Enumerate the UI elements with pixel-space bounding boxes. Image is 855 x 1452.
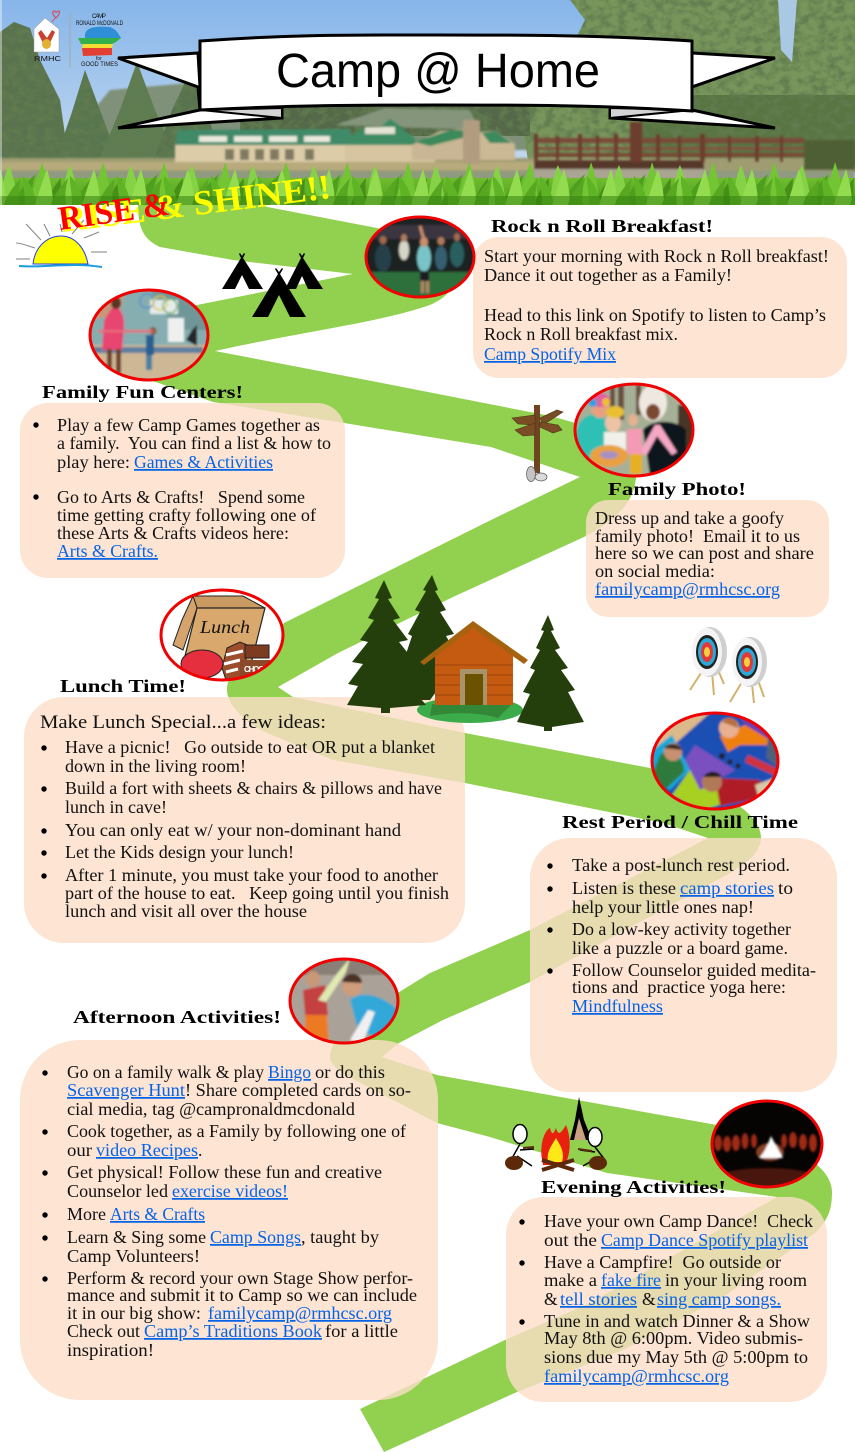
icon: tents bbox=[222, 253, 323, 317]
panel: afternoon activities: Scavenger Hunt bbox=[67, 1080, 185, 1100]
icon: campfire with marshmallow roasters bbox=[505, 1097, 607, 1170]
panel: evening activities: Have your own Camp Dance! Check bbox=[544, 1211, 813, 1231]
photo: hula hoops at family fun centers bbox=[88, 288, 210, 383]
title banner bbox=[118, 35, 775, 128]
panel: evening activities: May 8th @ 6:00pm. Video submis- bbox=[544, 1328, 803, 1348]
panel: afternoon activities: Cook together, as a Family by following one of bbox=[67, 1121, 406, 1141]
title text: Camp @ Home bbox=[276, 45, 600, 98]
panel: afternoon activities: it in our big show: bbox=[67, 1303, 201, 1323]
photo: goofy family photo bbox=[574, 383, 696, 479]
panel: family fun centers: Play a few Camp Games together as bbox=[57, 415, 320, 435]
photo: dancing at rock n roll breakfast bbox=[364, 216, 476, 298]
panel: evening activities: sing camp songs. bbox=[657, 1289, 781, 1309]
panel: lunch time: Build a fort with sheets & chairs & pillows and have bbox=[65, 778, 442, 798]
icon: signpost bbox=[512, 405, 563, 482]
header photo: camp lodge by the lake bbox=[0, 0, 855, 205]
panel: evening activities: fake fire bbox=[601, 1270, 661, 1290]
logo: Camp Ronald McDonald for Good Times bbox=[76, 14, 124, 68]
panel: family fun centers: Games & Activities bbox=[134, 452, 273, 472]
panel: evening activities: Camp Dance Spotify playlist bbox=[601, 1230, 808, 1250]
panel: evening activities: Have a Campfire! Go outside or bbox=[544, 1252, 781, 1272]
rise and shine heading: RISE & SHINE!! bbox=[58, 167, 333, 240]
panel: family fun centers bbox=[20, 382, 345, 578]
panel: lunch time bbox=[24, 676, 465, 943]
panel: lunch time: Have a picnic! Go outside to eat OR put a blanket bbox=[65, 737, 435, 757]
panel: afternoon activities: inspiration! bbox=[67, 1340, 154, 1360]
panel: afternoon activities: for a little bbox=[325, 1321, 398, 1341]
heading: rest period: Rest Period / Chill Time bbox=[562, 812, 798, 832]
panel: evening activities: sions due my May 5th @ 5:00pm to bbox=[544, 1347, 808, 1367]
panel: family fun centers: time getting crafty following one of bbox=[57, 505, 316, 525]
panel: afternoon activities: or do this bbox=[315, 1062, 385, 1082]
panel: lunch time: lunch in cave! bbox=[65, 797, 167, 817]
panel: afternoon activities: Learn & Sing some bbox=[67, 1227, 206, 1247]
panel: evening activities: out the bbox=[544, 1230, 597, 1250]
panel: evening activities: & bbox=[544, 1289, 558, 1309]
panel: afternoon activities: Perform & record your own Stage Show perfor- bbox=[67, 1268, 413, 1288]
panel: afternoon activities: Bingo bbox=[268, 1062, 311, 1082]
panel: rest period: Mindfulness bbox=[572, 996, 663, 1016]
panel: afternoon activities: our bbox=[67, 1140, 92, 1160]
logo: RMHC house: RMHC bbox=[34, 56, 61, 63]
heading: family photo: Family Photo! bbox=[608, 479, 746, 499]
panel: family photo: familycamp@rmhcsc.org bbox=[595, 579, 780, 599]
panel: evening activities: tell stories bbox=[560, 1289, 637, 1309]
panel: family photo: here so we can post and share bbox=[595, 543, 814, 563]
panel: family photo: on social media: bbox=[595, 561, 715, 581]
panel: evening activities: & bbox=[642, 1289, 656, 1309]
icon: sun bbox=[16, 220, 107, 267]
panel: rest period: to bbox=[778, 878, 793, 898]
panel: afternoon activities: Camp Volunteers! bbox=[67, 1246, 200, 1266]
panel: afternoon activities: , taught by bbox=[301, 1227, 379, 1247]
panel: afternoon activities: Go on a family walk & play bbox=[67, 1062, 264, 1082]
logo: Camp Ronald McDonald for Good Times: RONALD McDONALD bbox=[76, 21, 124, 27]
panel: family photo: Dress up and take a goofy bbox=[595, 508, 784, 528]
panel: lunch time: After 1 minute, you must take your food to another bbox=[65, 865, 438, 885]
photo: kids resting on mats bbox=[650, 711, 782, 811]
panel: afternoon activities: ! Share completed cards on so- bbox=[185, 1080, 411, 1100]
panel: lunch time: You can only eat w/ your non-dominant hand bbox=[65, 820, 401, 840]
panel: family photo: family photo! Email it to us bbox=[595, 526, 800, 546]
panel: lunch time: Make Lunch Special...a few ideas: bbox=[40, 712, 326, 733]
panel: rock n roll breakfast: Rock n Roll breakfast mix. bbox=[484, 324, 678, 344]
panel: lunch time: part of the house to eat. Keep going until you finish bbox=[65, 883, 449, 903]
panel: afternoon activities: Get physical! Follow these fun and creative bbox=[67, 1162, 382, 1182]
panel: rest period: Do a low-key activity together bbox=[572, 919, 791, 939]
panel: family fun centers: Go to Arts & Crafts! Spend some bbox=[57, 487, 305, 507]
heading: evening activities: Evening Activities! bbox=[541, 1177, 726, 1197]
panel: afternoon activities: Arts & Crafts bbox=[110, 1204, 205, 1224]
panel: rest period: Follow Counselor guided medita- bbox=[572, 960, 816, 980]
panel: afternoon activities: familycamp@rmhcsc.org bbox=[208, 1303, 392, 1323]
panel: lunch time: Let the Kids design your lunch! bbox=[65, 842, 294, 862]
panel: afternoon activities: . bbox=[198, 1140, 202, 1160]
photo: lunch bag clipart: CHOC bbox=[244, 665, 264, 674]
icon: archery targets bbox=[690, 627, 767, 703]
panel: lunch time: down in the living room! bbox=[65, 756, 246, 776]
panel: rock n roll breakfast: Dance it out together as a Family! bbox=[484, 265, 732, 285]
panel: afternoon activities: Camp Songs bbox=[210, 1227, 301, 1247]
panel: rest period: camp stories bbox=[680, 878, 774, 898]
panel: family fun centers: play here: bbox=[57, 452, 130, 472]
panel: family fun centers: these Arts & Crafts videos here: bbox=[57, 523, 289, 543]
panel: family photo bbox=[586, 479, 829, 617]
heading: lunch time: Lunch Time! bbox=[60, 676, 186, 696]
panel: rest period: like a puzzle or a board game. bbox=[572, 938, 788, 958]
logo: Camp Ronald McDonald for Good Times: for bbox=[96, 56, 102, 62]
heading: rock n roll breakfast: Rock n Roll Breakfast! bbox=[491, 216, 713, 236]
heading: family fun centers: Family Fun Centers! bbox=[42, 382, 243, 402]
panel: rock n roll breakfast: Camp Spotify Mix bbox=[484, 344, 616, 364]
panel: rock n roll breakfast: Start your morning with Rock n Roll breakfast! bbox=[484, 246, 829, 266]
rise and shine heading: RISE & bbox=[56, 186, 172, 238]
logo: Camp Ronald McDonald for Good Times: CAMP bbox=[92, 14, 106, 20]
panel: afternoon activities bbox=[20, 1007, 438, 1400]
winding green path bbox=[138, 205, 832, 1452]
panel: family fun centers: Arts & Crafts. bbox=[57, 541, 158, 561]
panel: evening activities: make a bbox=[544, 1270, 597, 1290]
panel: rest period: help your little ones nap! bbox=[572, 897, 754, 917]
panel: afternoon activities: video Recipes bbox=[96, 1140, 198, 1160]
panel: evening activities: familycamp@rmhcsc.org bbox=[544, 1366, 729, 1386]
panel: afternoon activities: Camp’s Traditions Book bbox=[144, 1321, 322, 1341]
icon: cabin and pine trees bbox=[347, 575, 584, 731]
panel: family fun centers: a family. You can find a list & how to bbox=[57, 433, 331, 453]
panel: rock n roll breakfast bbox=[473, 216, 847, 378]
panel: evening activities bbox=[506, 1177, 827, 1402]
panel: afternoon activities: cial media, tag @campronaldmcdonald bbox=[67, 1099, 355, 1119]
panel: rock n roll breakfast: Head to this link on Spotify to listen to Camp’s bbox=[484, 305, 826, 325]
heading: afternoon activities: Afternoon Activities! bbox=[73, 1007, 281, 1027]
panel: lunch time: lunch and visit all over the house bbox=[65, 901, 307, 921]
photo: lunch bag clipart bbox=[160, 589, 286, 683]
panel: evening activities: in your living room bbox=[665, 1270, 807, 1290]
panel: rest period: tions and practice yoga here: bbox=[572, 977, 786, 997]
panel: afternoon activities: exercise videos! bbox=[172, 1181, 288, 1201]
panel: afternoon activities: More bbox=[67, 1204, 106, 1224]
photo: kids playing outdoors bbox=[288, 957, 402, 1047]
panel: rest period: Take a post-lunch rest period. bbox=[572, 855, 790, 875]
logo: Camp Ronald McDonald for Good Times: GOOD TIMES bbox=[81, 62, 118, 68]
panel: evening activities: Tune in and watch Dinner & a Show bbox=[544, 1311, 810, 1331]
photo: lunch bag clipart: Lunch bbox=[199, 617, 250, 637]
panel: afternoon activities: mance and submit it to Camp so we can include bbox=[67, 1285, 417, 1305]
panel: rest period: Listen is these bbox=[572, 878, 676, 898]
logo: RMHC house bbox=[34, 11, 70, 68]
panel: afternoon activities: Counselor led bbox=[67, 1181, 168, 1201]
panel: rest period bbox=[530, 812, 837, 1092]
photo: campfire at night bbox=[710, 1099, 824, 1192]
panel: afternoon activities: Check out bbox=[67, 1321, 140, 1341]
